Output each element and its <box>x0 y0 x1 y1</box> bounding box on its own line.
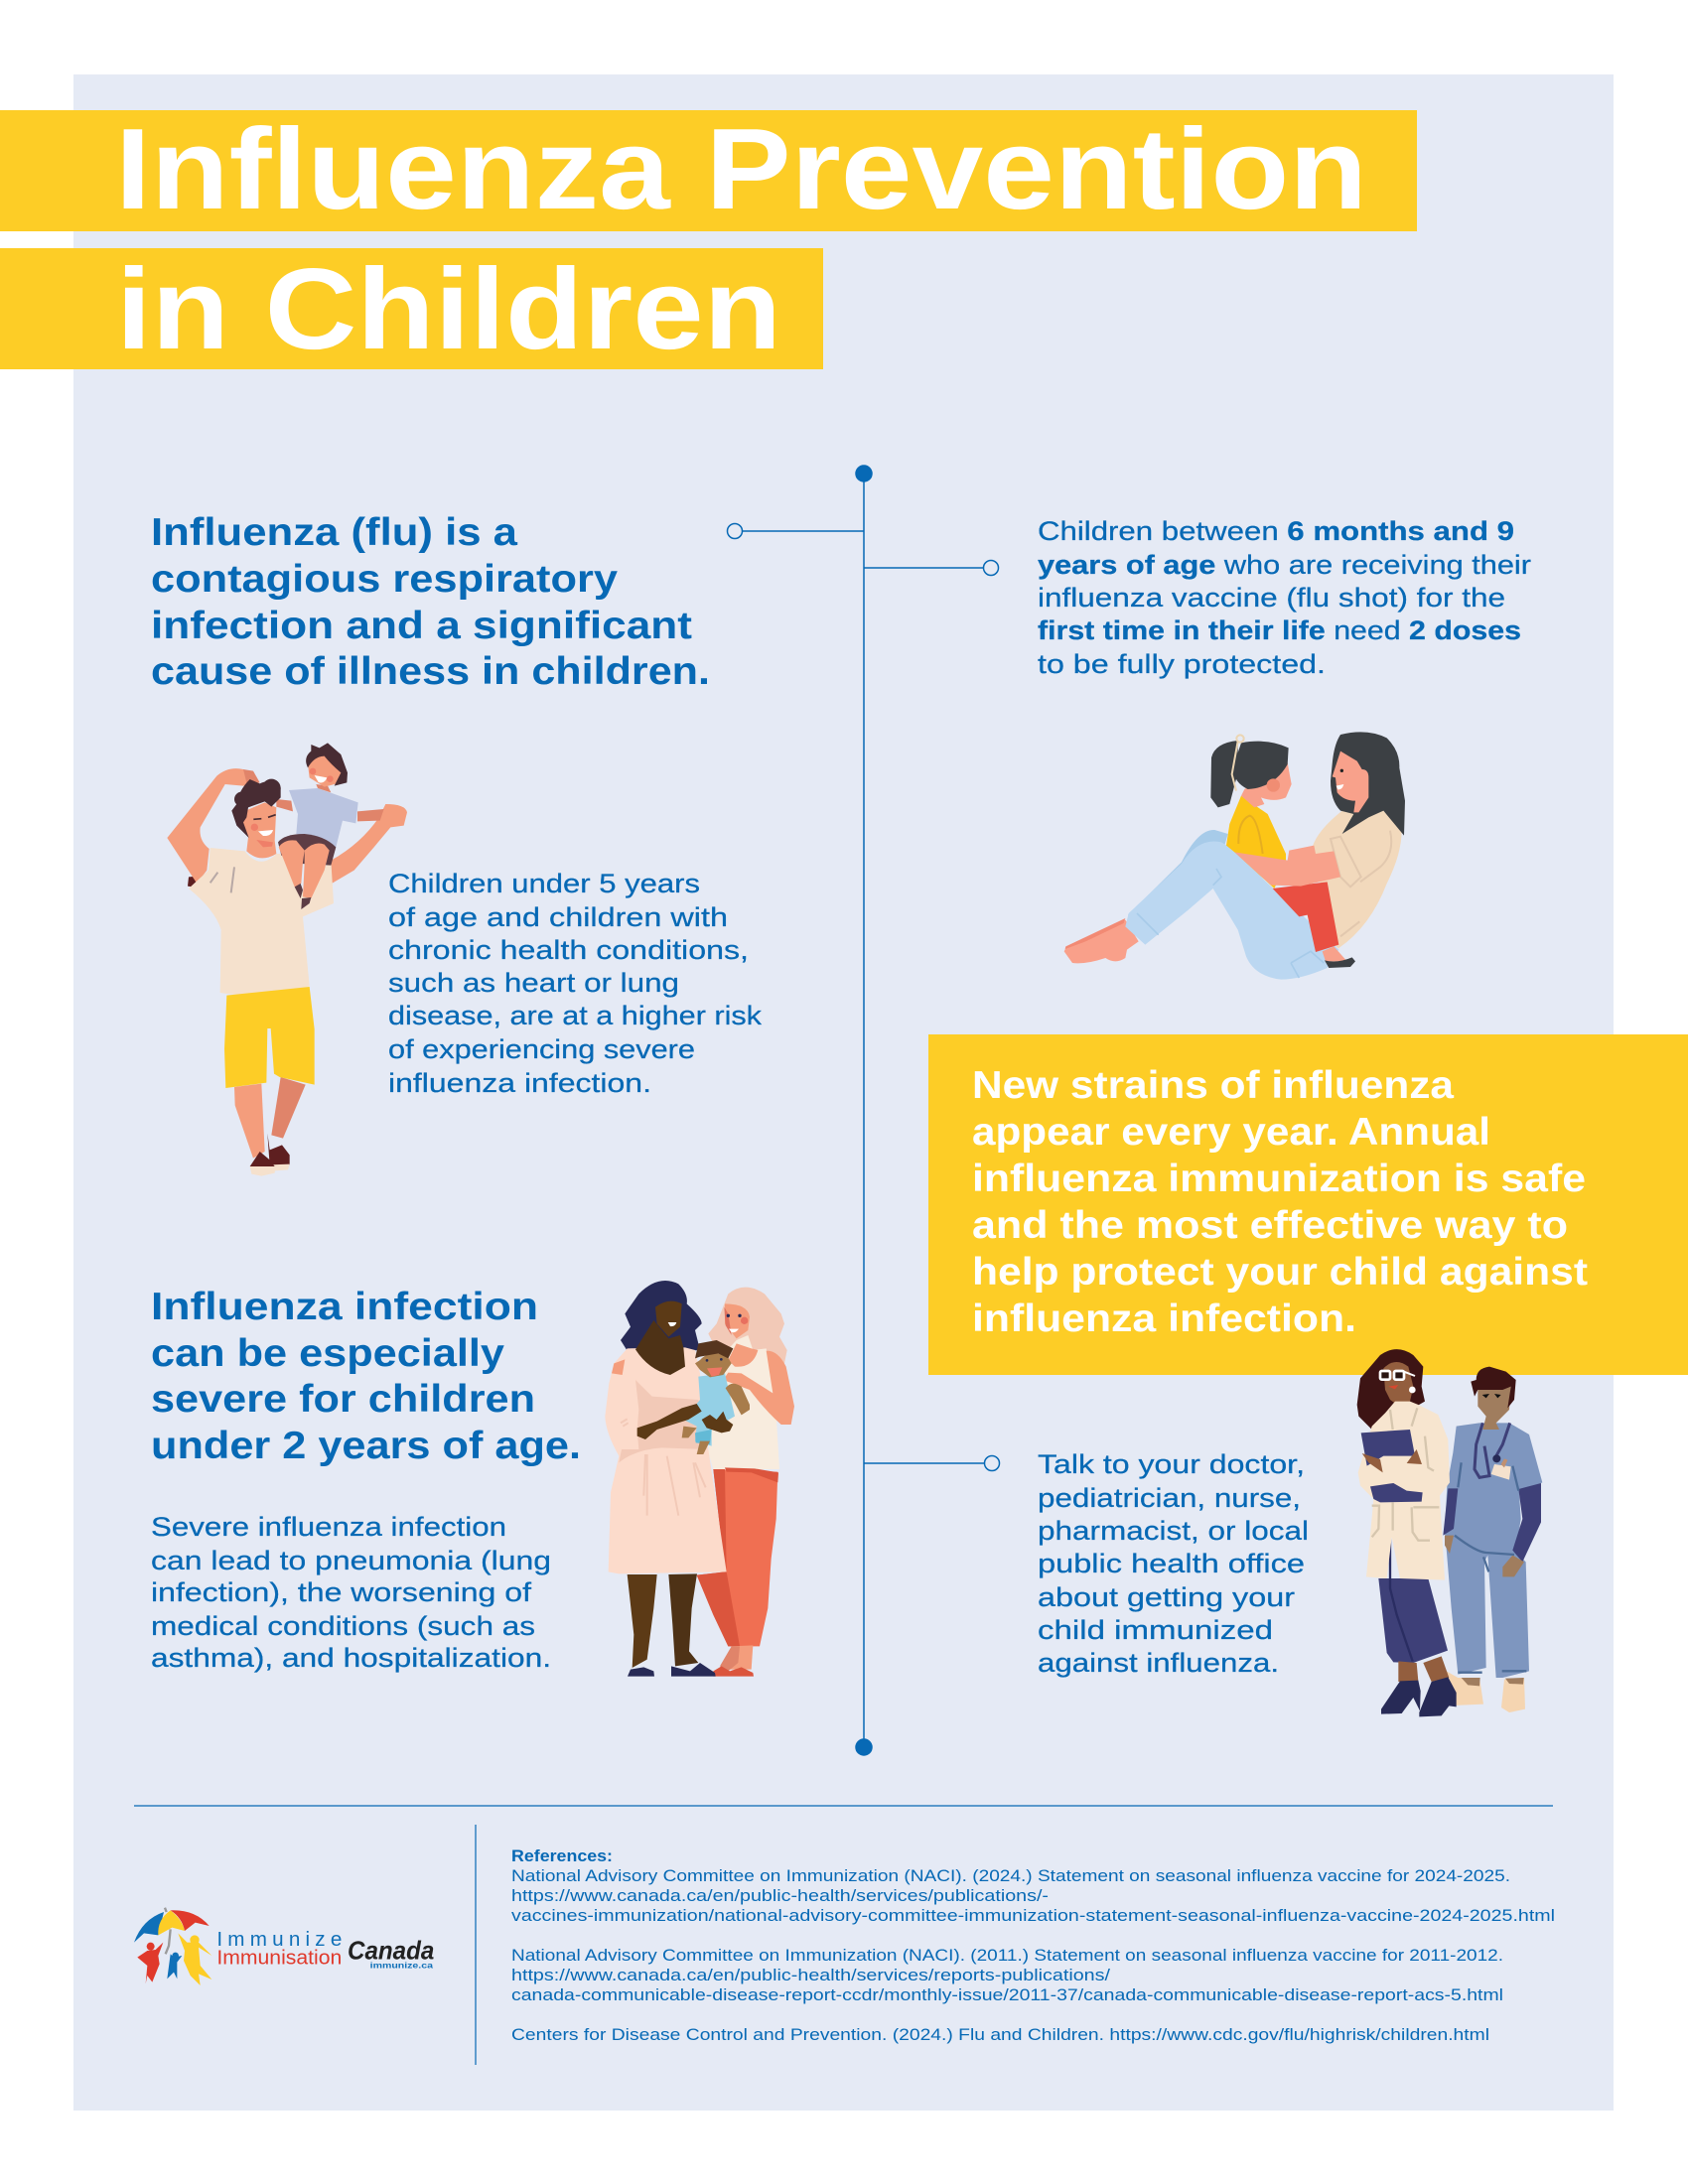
text: two doses: first time in their life need 2 doses <box>1038 615 1521 645</box>
references: vaccines-immunization/national-advisory-committee-immunization-statement-seasonal-influenza-vaccine-2024-2025.html <box>511 1907 1555 1925</box>
text: two doses <box>1038 516 1531 679</box>
callout: annual immunization: help protect your child against <box>972 1251 1588 1294</box>
callout: annual immunization: New strains of influenza <box>972 1064 1454 1107</box>
illustration: father carrying child on shoulders <box>167 743 407 1176</box>
text: talk to your doctor: Talk to your doctor, <box>1038 1449 1305 1479</box>
heading: severe for under 2: severe for children <box>151 1378 535 1421</box>
footer vertical divider <box>475 1825 477 2065</box>
heading: influenza is contagious: contagious respiratory <box>151 558 618 601</box>
text: severe infection outcomes <box>151 1512 551 1673</box>
heading: influenza is contagious: cause of illness in children. <box>151 650 710 693</box>
illustration: mother and daughter <box>1064 732 1405 980</box>
text: higher risk children: Children under 5 years <box>388 869 700 898</box>
text: talk to your doctor: against influenza. <box>1038 1648 1279 1678</box>
text: higher risk children: such as heart or lung <box>388 968 679 998</box>
heading: severe for under 2: under 2 years of age. <box>151 1425 581 1467</box>
illustration: doctor and nurse <box>1357 1349 1542 1716</box>
logo: Immunize Canada <box>134 1908 434 1985</box>
references: National Advisory Committee on Immunization (NACI). (2011.) Statement on seasonal influenza vaccine for 2011-2012. <box>511 1947 1503 1965</box>
text: severe infection outcomes: asthma), and hospitalization. <box>151 1643 551 1673</box>
callout: annual immunization: influenza immunization is safe <box>972 1158 1586 1200</box>
heading: influenza is contagious: infection and a significant <box>151 605 692 647</box>
references: References: <box>511 1847 613 1865</box>
text: higher risk children: influenza infection. <box>388 1068 651 1098</box>
title: Influenza Prevention <box>115 104 1367 233</box>
text: two doses: influenza vaccine (flu shot) for the <box>1038 583 1505 613</box>
heading: influenza is contagious: Influenza (flu) is a <box>151 511 517 554</box>
footer divider <box>134 1805 1553 1807</box>
text: two doses: to be fully protected. <box>1038 649 1326 679</box>
callout: annual immunization <box>928 1034 1688 1375</box>
text: two doses: years of age who are receiving their <box>1038 550 1531 580</box>
text: higher risk children: disease, are at a higher risk <box>388 1001 763 1030</box>
references: National Advisory Committee on Immunization (NACI). (2024.) Statement on seasonal influenza vaccine for 2024-2025. <box>511 1867 1510 1885</box>
text: talk to your doctor: child immunized <box>1038 1615 1273 1645</box>
text: talk to your doctor <box>1038 1449 1309 1678</box>
logo: Immunize Canada: Immunisation <box>216 1946 342 1969</box>
title: in Children <box>116 244 781 373</box>
text: talk to your doctor: pediatrician, nurse, <box>1038 1483 1301 1513</box>
text: talk to your doctor: about getting your <box>1038 1582 1295 1612</box>
callout: annual immunization: influenza infection. <box>972 1297 1356 1340</box>
text: two doses: Children between 6 months and 9 <box>1038 516 1514 546</box>
references: https://www.canada.ca/en/public-health/services/publications/- <box>511 1887 1049 1905</box>
logo: Immunize Canada: Immunize <box>216 1928 342 1951</box>
title <box>0 104 1417 373</box>
text: higher risk children: chronic health conditions, <box>388 935 749 965</box>
text: severe infection outcomes: can lead to pneumonia (lung <box>151 1546 551 1575</box>
logo: Immunize Canada: Canada <box>348 1935 434 1965</box>
text: talk to your doctor: pharmacist, or local <box>1038 1516 1309 1546</box>
illustration: two mothers with baby <box>605 1281 794 1677</box>
heading: severe for under 2: can be especially <box>151 1332 504 1375</box>
references: Centers for Disease Control and Prevention. (2024.) Flu and Children. https://www.cdc.gov/flu/highrisk/children.html <box>511 2026 1489 2044</box>
heading: severe for under 2 <box>151 1286 581 1467</box>
references: https://www.canada.ca/en/public-health/services/reports-publications/ <box>511 1967 1110 1984</box>
text: severe infection outcomes: medical conditions (such as <box>151 1611 535 1641</box>
text: higher risk children: of experiencing severe <box>388 1034 695 1064</box>
logo: Immunize Canada: immunize.ca <box>370 1962 434 1971</box>
callout: annual immunization: and the most effective way to <box>972 1204 1568 1247</box>
text: talk to your doctor: public health office <box>1038 1549 1305 1578</box>
text: higher risk children <box>388 869 763 1098</box>
timeline with connectors <box>727 466 999 1755</box>
text: higher risk children: of age and children with <box>388 902 728 932</box>
heading: severe for under 2: Influenza infection <box>151 1286 538 1328</box>
heading: influenza is contagious <box>151 511 710 693</box>
references <box>511 1847 1555 2044</box>
callout: annual immunization: appear every year. Annual <box>972 1111 1490 1154</box>
text: severe infection outcomes: infection), the worsening of <box>151 1577 532 1607</box>
text: severe infection outcomes: Severe influenza infection <box>151 1512 506 1542</box>
references: canada-communicable-disease-report-ccdr/monthly-issue/2011-37/canada-communicable-disease-report-acs-5.html <box>511 1986 1503 2004</box>
